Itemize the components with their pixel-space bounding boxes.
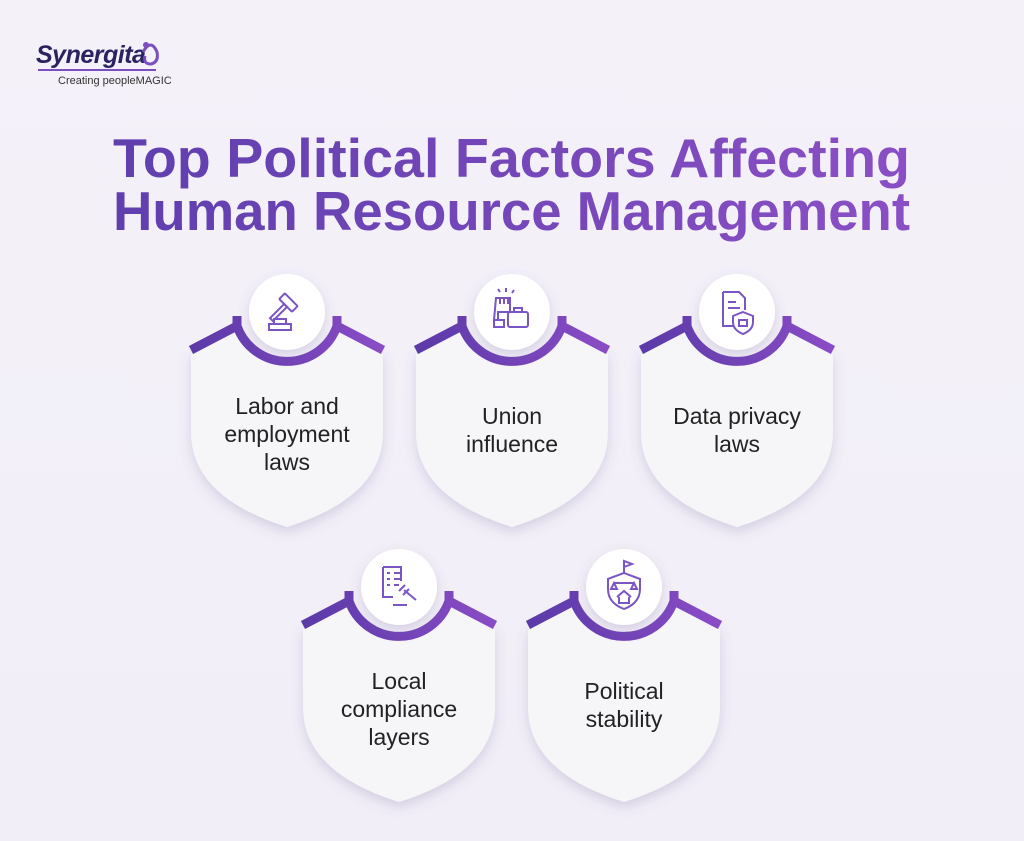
icon: fist and briefcase bbox=[494, 288, 528, 327]
text: compliance bbox=[341, 696, 457, 722]
text: layers bbox=[368, 724, 430, 750]
text: employment bbox=[224, 421, 350, 447]
title bbox=[113, 127, 910, 242]
logo: Creating peopleMAGIC bbox=[58, 75, 172, 87]
card: Data privacy laws bbox=[641, 274, 833, 527]
text: laws bbox=[264, 449, 310, 475]
text: laws bbox=[714, 431, 760, 457]
logo: Synergita bbox=[36, 41, 146, 69]
text: Local bbox=[372, 668, 426, 694]
text: Political bbox=[584, 678, 664, 704]
card: Political stability bbox=[528, 549, 720, 802]
icon: gavel bbox=[265, 293, 298, 330]
icon: document with lock bbox=[723, 292, 753, 334]
title: Human Resource Management bbox=[113, 180, 910, 242]
text: stability bbox=[586, 706, 663, 732]
icon: shield with scales bbox=[608, 561, 640, 609]
title: Top Political Factors Affecting bbox=[113, 127, 910, 189]
icon: checklist and gavel bbox=[383, 567, 416, 605]
logo bbox=[36, 41, 172, 87]
card: Labor and employment laws bbox=[191, 274, 383, 527]
card: Local compliance layers bbox=[303, 549, 495, 802]
text: influence bbox=[466, 431, 558, 457]
text: Labor and bbox=[235, 393, 339, 419]
card: Union influence bbox=[416, 274, 608, 527]
text: Data privacy bbox=[673, 403, 801, 429]
text: Union bbox=[482, 403, 542, 429]
